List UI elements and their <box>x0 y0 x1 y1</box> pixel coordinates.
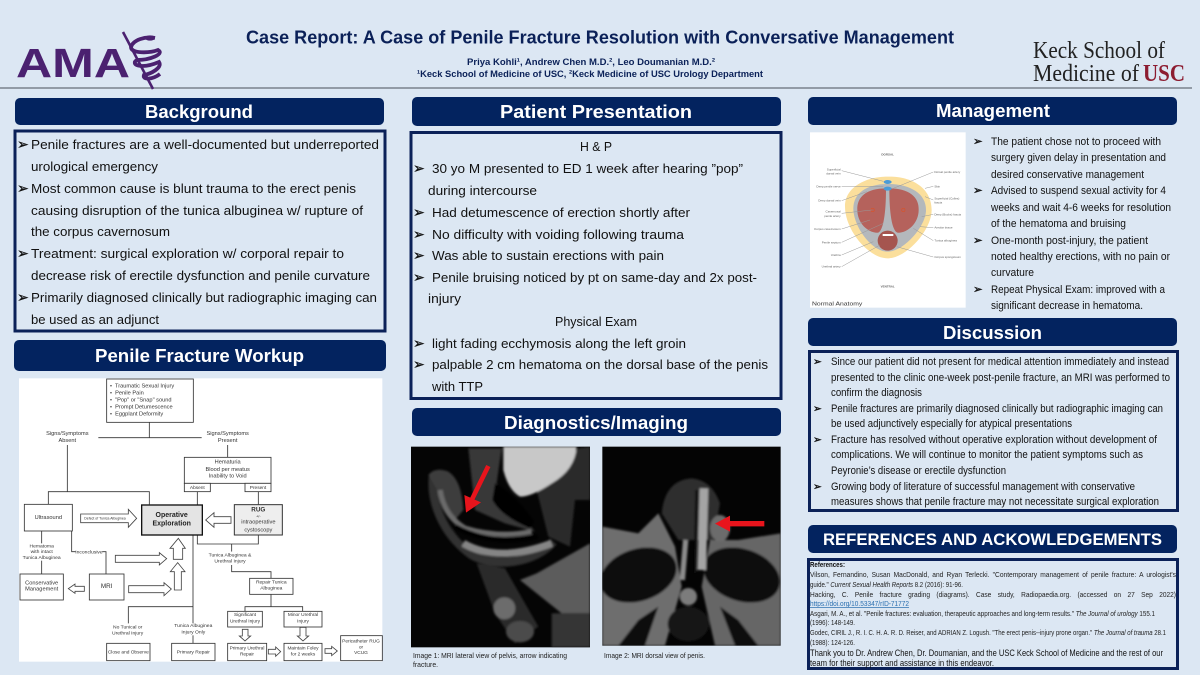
image: MRI lateral view (schematic) <box>411 447 590 647</box>
top symptoms box: • "Pop" or "Snap" sound <box>110 398 172 404</box>
arrow: hematoma indicator <box>715 516 764 532</box>
top symptoms box: • Traumatic Sexual Injury <box>110 384 174 390</box>
panel: Background: ➢ <box>17 137 29 153</box>
panel: Background: ➢ <box>17 181 29 197</box>
hematuria box: Present <box>250 485 267 491</box>
heading: Management: Management <box>936 100 1050 121</box>
logo: Keck School of Medicine of USC <box>1033 38 1185 87</box>
top symptoms box <box>107 379 193 422</box>
logo: Keck School of Medicine of USC: USC <box>1143 61 1185 87</box>
text block: Management <box>973 134 1171 312</box>
text block: Management: significant decrease in hematoma. <box>991 300 1143 312</box>
pericatheter RUG box: Pericatheter RUG <box>342 639 380 645</box>
heading: Discussion: Discussion <box>943 322 1042 343</box>
conservative management box <box>20 574 63 600</box>
panel: Patient Presentation: light fading ecchymosis along the left groin <box>432 336 686 351</box>
anatomy labels: Urethra <box>831 253 841 257</box>
connector labels: Urethral Injury <box>112 630 144 636</box>
panel: Discussion: ➢ <box>813 356 822 368</box>
hematuria box: Absent <box>190 485 205 491</box>
operative exploration box: Operative <box>156 512 188 519</box>
panel: Patient Presentation: Had detumescence of erection shortly after <box>432 205 691 220</box>
panel: Patient Presentation: ➢ <box>413 161 425 177</box>
anatomy labels: Superficial (Colles) <box>934 196 959 200</box>
heading: Management <box>808 97 1177 125</box>
minor urethral injury box: Injury <box>297 618 309 624</box>
panel: References and Acknowledgements: Godec, CIRIL J., R. I. C. H. A. R. D. Reiser, and ADRIAN Z. Logush. "The erect penis--injury prone organ." The Journal of trauma 28.1 <box>810 628 1166 637</box>
primary urethral repair box: Repair <box>240 651 254 657</box>
title: Case Report: A Case of Penile Fracture Resolution with Conversative Management <box>246 28 954 48</box>
panel: Background: decrease risk of erectile dysfunction and penile curvature <box>31 268 370 283</box>
text block: Management: of the hematoma and bruising <box>991 218 1126 230</box>
connector labels: Tunica Albuginea <box>23 555 61 561</box>
branch labels: Signs/Symptoms <box>46 431 89 437</box>
panel: Discussion: confirm the diagnosis <box>831 387 922 399</box>
panel: Patient Presentation: injury <box>428 291 462 306</box>
text block: Management: noted healthy erections, with no pain or <box>991 251 1170 263</box>
connector labels <box>23 543 252 636</box>
primary urethral repair box: Primary Urethral <box>230 646 264 652</box>
significant urethral injury box: Significant <box>234 612 257 618</box>
hematuria box: Inability to Void <box>209 474 247 480</box>
text block: Management: One-month post-injury, the patient <box>991 235 1149 247</box>
panel: Patient Presentation: Physical Exam <box>555 314 637 329</box>
anatomy labels: DORSAL <box>881 153 894 157</box>
repair tunica albuginea box: Albuginea <box>260 585 283 591</box>
RUG box: +/- <box>256 513 261 518</box>
pericatheter RUG box <box>341 636 382 661</box>
pericatheter RUG box: VCUG <box>354 650 368 656</box>
panel: Background: be used as an adjunct <box>31 312 159 327</box>
heading: References and Acknowledgements <box>808 525 1177 553</box>
panel: References and Acknowledgements: (1996): 148-149. <box>810 618 855 627</box>
top symptoms box: • Eggplant Deformity <box>110 412 163 418</box>
anatomy labels: dorsal vein <box>826 172 841 176</box>
panel: References and Acknowledgements: (1988): 124-126. <box>810 638 855 647</box>
panel: Background: ➢ <box>17 290 29 306</box>
heading: Patient Presentation: Patient Presentation <box>500 101 692 122</box>
panel: Patient Presentation: during intercourse <box>428 183 537 198</box>
primary repair box <box>172 643 215 661</box>
panel: Background: urological emergency <box>31 159 158 174</box>
heading: Diagnostics/Imaging <box>412 408 781 436</box>
panel: Patient Presentation: H & P <box>580 139 612 154</box>
maintain foley box: for 2 weeks <box>291 651 316 657</box>
anatomy labels: Corpus cavernosum <box>814 227 841 231</box>
panel: Discussion: Peyronie’s disease or erectile dysfunction <box>831 465 1006 477</box>
panel: Background: Primarily diagnosed clinically but radiographic imaging can <box>31 290 377 305</box>
logo: AMA: AMA <box>16 40 130 86</box>
connector labels: Tunica Albuginea <box>174 623 213 629</box>
anatomy labels: penile artery <box>824 214 841 218</box>
text block: Management: surgery given delay in presentation and <box>991 152 1166 164</box>
panel: Patient Presentation: ➢ <box>413 227 425 243</box>
MRI box: MRI <box>101 583 113 590</box>
panel: References and Acknowledgements <box>808 560 1178 668</box>
panel: Background: causing disruption of the tunica albuginea w/ rupture of <box>31 203 363 218</box>
panel: Discussion: be used adjunctively especially for atypical presentations <box>831 418 1072 430</box>
maintain foley box: Maintain Foley <box>287 646 319 652</box>
connector labels: Tunica Albuginea & <box>209 552 252 558</box>
authors: Priya Kohli¹, Andrew Chen M.D.², Leo Doumanian M.D.² <box>467 57 715 67</box>
image: MRI dorsal view (schematic) <box>593 447 787 646</box>
RUG box: cystoscopy <box>244 527 272 533</box>
branch labels: Present <box>218 438 238 444</box>
connector labels: Injury Only <box>181 629 206 635</box>
text block: Management: The patient chose not to proceed with <box>991 136 1161 148</box>
operative exploration box: Exploration <box>152 521 191 528</box>
repair tunica albuginea box <box>250 578 293 594</box>
MRI box <box>89 574 124 600</box>
text block: Management: weeks and wait 4-6 weeks for resolution <box>990 202 1171 214</box>
panel: Background: Treatment: surgical exploration w/ corporal repair to <box>31 246 344 261</box>
significant urethral injury box: Urethral Injury <box>230 618 261 624</box>
panel: References and Acknowledgements: Asgari, M. A., et al. "Penile fractures: evaluation, therapeutic approaches and long-term results." The Journal of urology 155.1 <box>810 609 1155 618</box>
text block: Management: ➢ <box>973 282 983 296</box>
panel: Patient Presentation: No difficulty with voiding following trauma <box>432 227 685 242</box>
panel: Patient Presentation: palpable 2 cm hematoma on the dorsal base of the penis <box>432 357 769 372</box>
primary urethral repair box <box>228 643 267 661</box>
panel: Discussion: Growing body of literature of successful management with conservative <box>831 481 1135 493</box>
panel: Discussion: complications. We will continue to monitor the patient symptoms such as <box>831 449 1143 461</box>
heading: Background <box>15 98 384 125</box>
panel: Discussion: ➢ <box>813 481 822 493</box>
RUG box <box>234 505 282 535</box>
close and observe box: Close and Observe <box>108 649 149 655</box>
affiliations: ¹Keck School of Medicine of USC, ²Keck Medicine of USC Urology Department <box>417 69 763 79</box>
workflow arrows <box>68 513 337 656</box>
panel: Background: Penile fractures are a well-documented but underreported <box>31 137 379 152</box>
panel: Background <box>15 131 385 331</box>
heading: Penile Fracture Workup <box>14 340 386 371</box>
close and observe box <box>107 643 150 661</box>
heading: Patient Presentation <box>412 97 781 126</box>
anatomy labels: Penile septum <box>822 240 841 244</box>
heading: Discussion <box>808 318 1177 346</box>
caption: normal anatomy: Normal Anatomy <box>812 301 863 307</box>
anatomy labels: Deep penile nerve <box>816 184 841 188</box>
panel: References and Acknowledgements: team for their support and assistance in this endeavor. <box>810 658 994 668</box>
text block: Management: desired conservative management <box>991 169 1145 181</box>
panel: Discussion <box>810 352 1178 510</box>
connector labels: No Tunical or <box>113 624 143 630</box>
text block: Management: ➢ <box>973 233 983 247</box>
panel: References and Acknowledgements: guide." Current Sexual Health Reports 8.2 (2016): 91-96. <box>810 580 963 589</box>
text block: Management: ➢ <box>973 183 983 197</box>
anatomy labels: VENTRAL <box>881 284 895 288</box>
pericatheter RUG box: or <box>359 644 364 650</box>
maintain foley box <box>284 643 322 661</box>
top symptoms box: • Prompt Detumescence <box>110 405 173 411</box>
panel: References and Acknowledgements: https://doi.org/10.53347/rID-71772 <box>810 599 909 608</box>
primary repair box: Primary Repair <box>177 649 210 655</box>
text block: Management: Advised to suspend sexual activity for 4 <box>991 185 1166 197</box>
hematuria box <box>184 457 271 492</box>
minor urethral injury box <box>284 611 322 627</box>
panel: Patient Presentation: ➢ <box>413 336 425 352</box>
branch labels: Absent <box>59 438 77 444</box>
panel: Patient Presentation: ➢ <box>413 357 425 373</box>
panel: References and Acknowledgements: References: <box>810 560 845 569</box>
panel: Patient Presentation: 30 yo M presented to ED 1 week after hearing ”pop” <box>432 161 743 176</box>
logo: Keck School of Medicine of USC: Keck School of <box>1033 38 1165 64</box>
panel: Discussion: Fracture has resolved without operative exploration without development of <box>831 434 1158 446</box>
panel: Background: ➢ <box>17 246 29 262</box>
panel: Background: Most common cause is blunt trauma to the erect penis <box>31 181 357 196</box>
panel: Patient Presentation: Was able to sustain erections with pain <box>432 248 664 263</box>
significant urethral injury box <box>228 611 262 627</box>
caption: image 2: Image 2: MRI dorsal view of penis. <box>604 651 705 660</box>
panel: Patient Presentation: ➢ <box>413 205 425 221</box>
anatomy labels: Tunica albuginea <box>934 239 957 243</box>
anatomy labels: Deep dorsal vein <box>818 199 841 203</box>
text block: Management: ➢ <box>973 134 983 148</box>
arrow: defect of tunica albuginea: Defect of Tunica Albuginea <box>84 516 126 520</box>
anatomy labels: Deep (Bucks) fascia <box>934 212 961 216</box>
panel: References and Acknowledgements: Vilson, Fernandino, Susan MacDonald, and Ryan Terlecki. "Contemporary management of penile fracture: A urologist's <box>810 570 1176 579</box>
branch labels: Signs/Symptoms <box>206 431 249 437</box>
heading: Diagnostics/Imaging: Diagnostics/Imaging <box>504 412 688 433</box>
hematuria box: Hematuria <box>215 460 242 466</box>
connector labels: with intact <box>31 549 53 555</box>
arrow: defect of tunica albuginea <box>81 509 137 527</box>
anatomy labels: Cavernosal <box>826 210 841 214</box>
anatomy labels: Dorsal penile artery <box>934 170 961 174</box>
caption: image 1: fracture. <box>413 660 438 669</box>
panel: Discussion: ➢ <box>813 434 822 446</box>
anatomy labels: Corpus spongiosum <box>934 255 961 259</box>
heading: Background: Background <box>145 101 253 122</box>
RUG box: intraoperative <box>241 520 275 526</box>
repair tunica albuginea box: Repair Tunica <box>256 579 287 585</box>
arrow: fracture indicator <box>464 466 488 513</box>
anatomy labels: fascia <box>934 200 942 204</box>
panel: References and Acknowledgements: Hacking, C. Penile fracture grading (diagrams). Case study, Radiopaedia.org. (accessed on 27 Sep 2022) <box>810 590 1176 599</box>
caption: image 1 <box>413 651 567 669</box>
anatomy labels <box>814 153 961 288</box>
logo: Keck School of Medicine of USC: Medicine of <box>1033 61 1139 87</box>
panel: Discussion: ➢ <box>813 403 822 415</box>
anatomy labels: Skin <box>934 184 940 188</box>
connector labels: Inconclusive <box>75 549 103 555</box>
panel: Patient Presentation: ➢ <box>413 248 425 264</box>
panel: Patient Presentation <box>411 132 781 398</box>
anatomy labels: Urethral artery <box>822 264 841 268</box>
operative exploration box <box>142 505 202 535</box>
diagram: normal anatomy cross-section <box>810 132 966 308</box>
panel: Background: the corpus cavernosum <box>31 224 170 239</box>
anatomy labels: Areolar tissue <box>934 226 953 230</box>
connector labels: Hematoma <box>29 543 54 549</box>
chart: workup flowchart <box>19 378 382 662</box>
logo: AMA <box>16 32 160 89</box>
anatomy labels: Superficial <box>827 168 841 172</box>
branch labels <box>46 431 249 444</box>
connector labels: Urethral Injury <box>214 559 246 565</box>
conservative management box: Conservative <box>25 580 58 586</box>
panel: Patient Presentation: ➢ <box>413 270 425 286</box>
ultrasound box <box>24 504 72 531</box>
conservative management box: Management <box>25 587 59 593</box>
panel: Patient Presentation: with TTP <box>431 379 483 394</box>
text block: Management: Repeat Physical Exam: improved with a <box>991 284 1166 296</box>
top symptoms box: • Penile Pain <box>110 391 144 397</box>
ultrasound box: Ultrasound <box>35 515 62 521</box>
heading: References and Acknowledgements: REFERENCES AND ACKOWLEDGEMENTS <box>823 530 1162 549</box>
heading: Penile Fracture Workup: Penile Fracture Workup <box>95 345 304 366</box>
hematuria box: Blood per meatus <box>205 467 250 473</box>
RUG box: RUG <box>251 506 265 513</box>
panel: Patient Presentation: Penile bruising noticed by pt on same-day and 2x post- <box>432 270 757 285</box>
text block: Management: curvature <box>991 267 1034 279</box>
caption: image 1: Image 1: MRI lateral view of pelvis, arrow indicating <box>413 651 567 660</box>
minor urethral injury box: Minor Urethral <box>288 612 318 618</box>
